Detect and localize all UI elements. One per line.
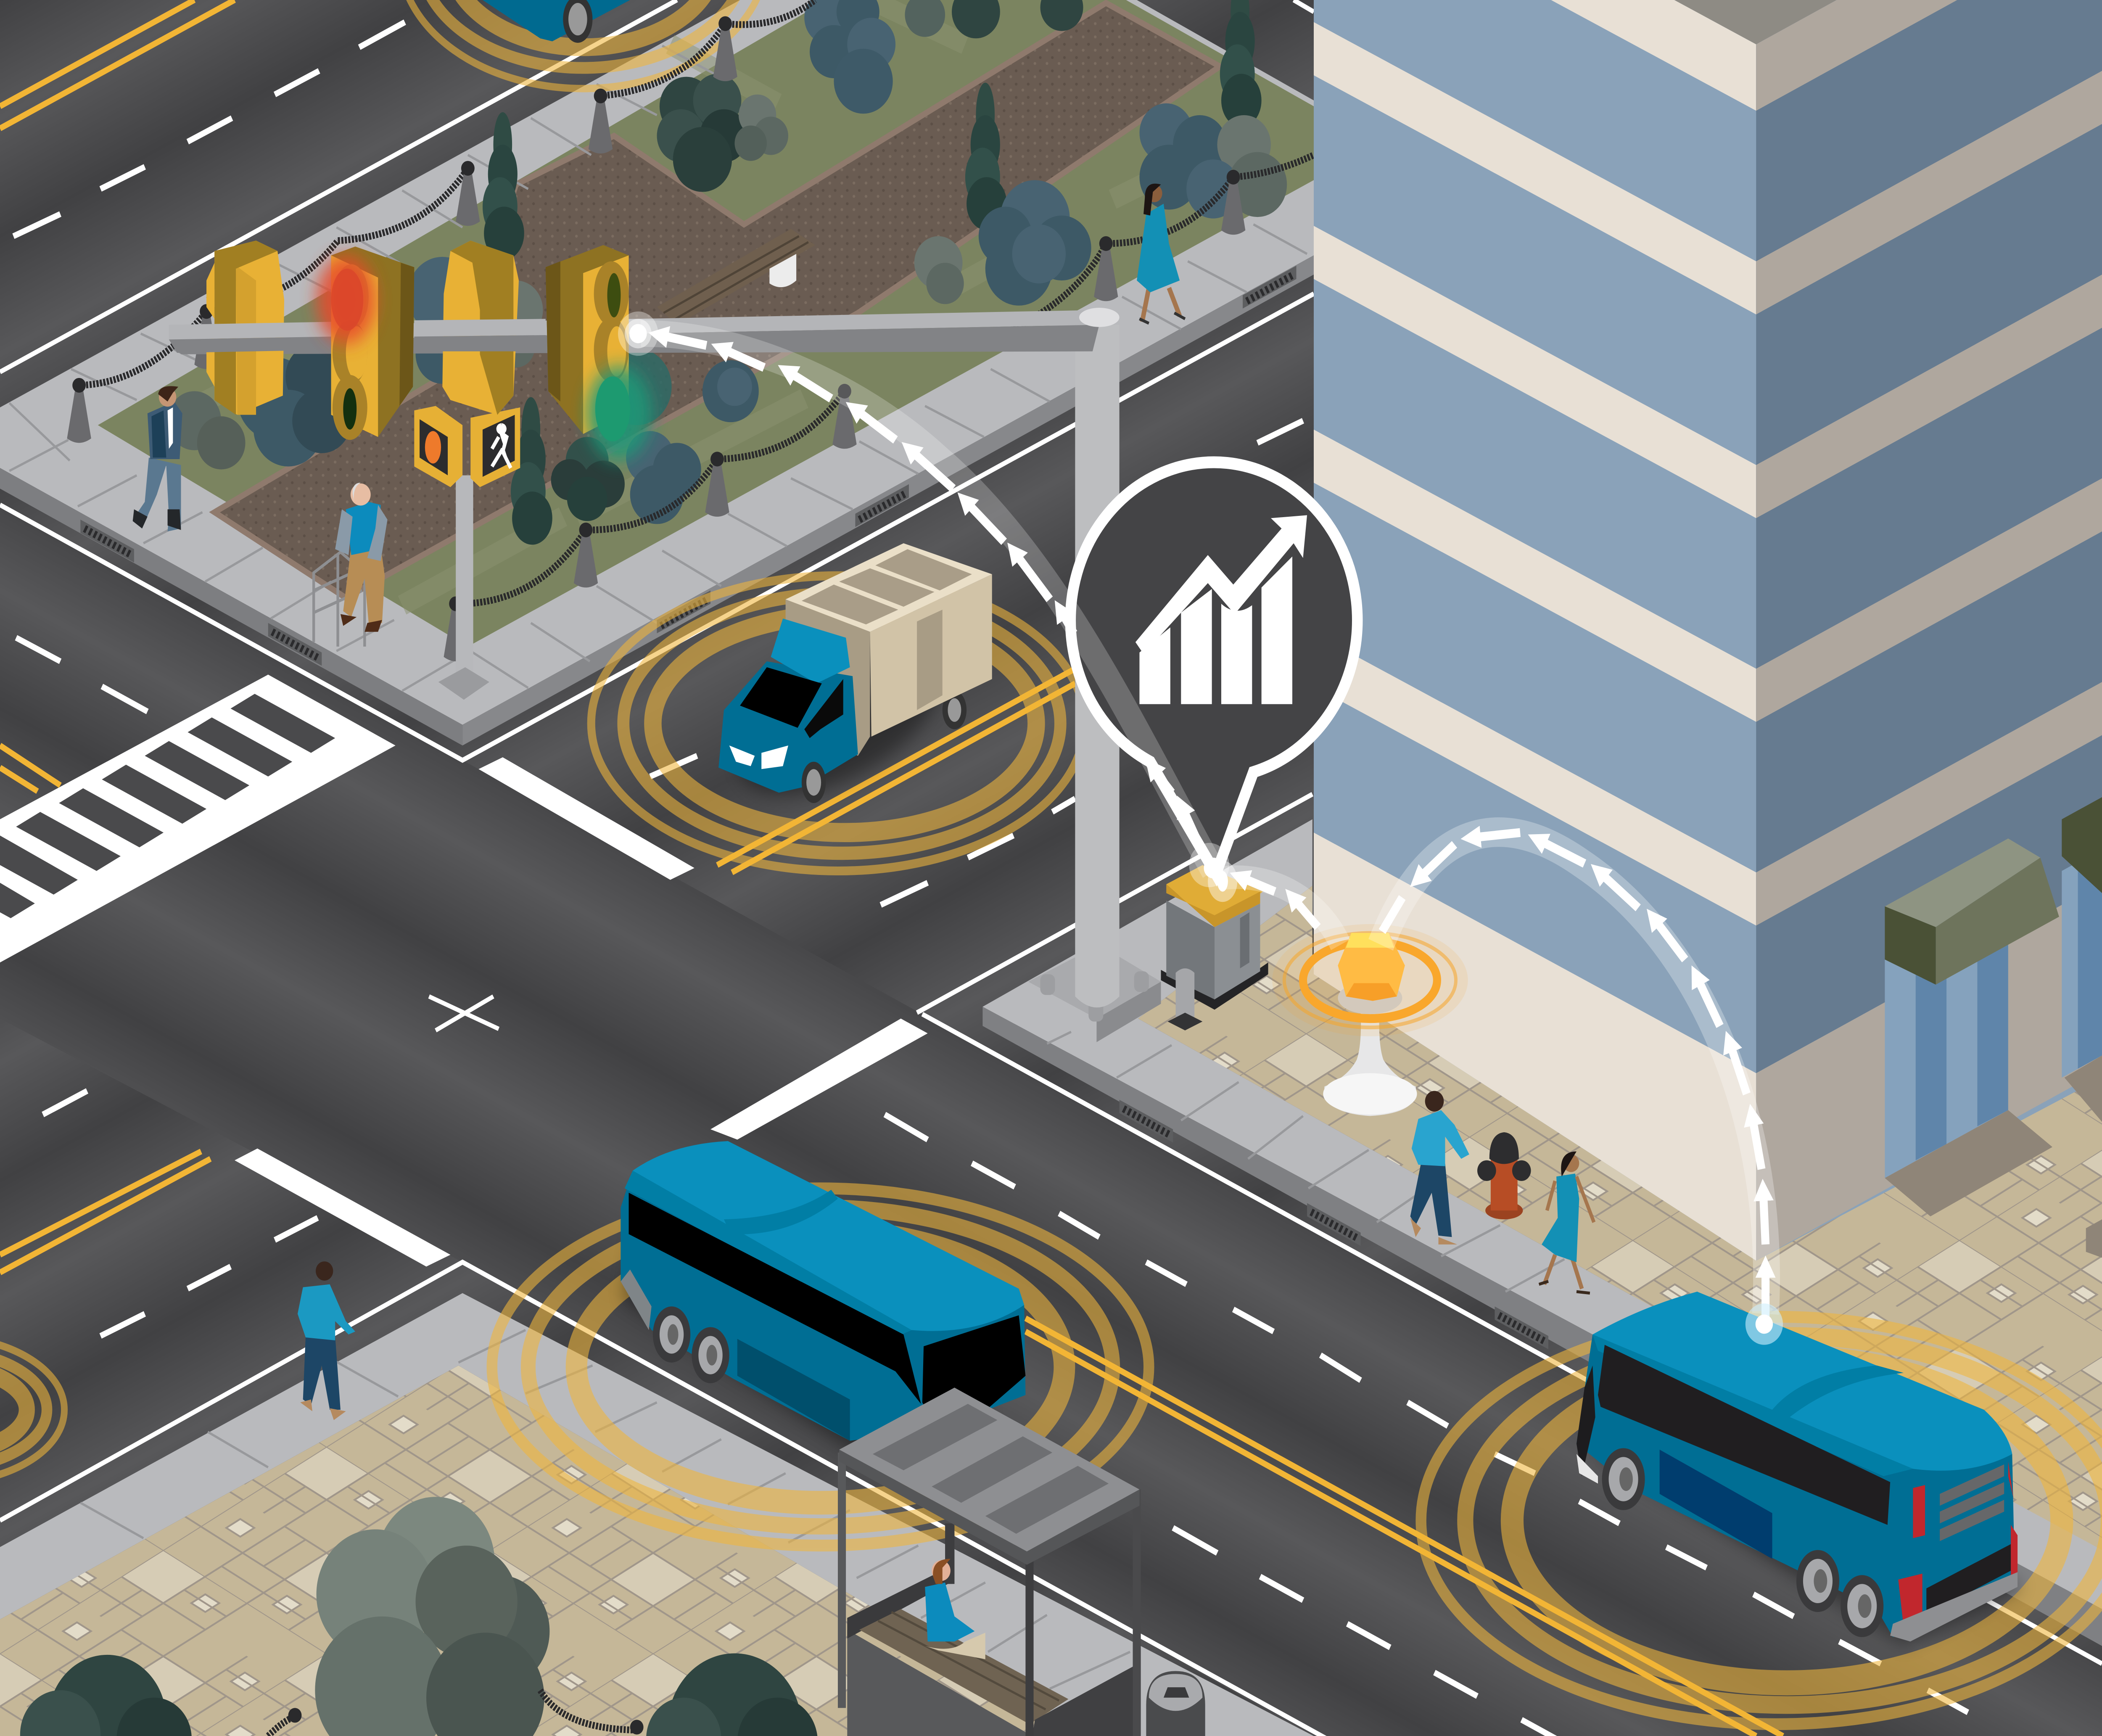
lower right sidewalk and paving bbox=[982, 819, 2102, 1646]
data flow arc: bus to orb bbox=[1381, 832, 1783, 1345]
traffic light with red lens bbox=[317, 246, 414, 440]
top bus partial bbox=[483, 0, 630, 43]
building right face bbox=[1756, 0, 2102, 1073]
street furniture cabinet bbox=[1161, 865, 1268, 1031]
building bbox=[1314, 0, 2102, 1260]
chain barriers with posts bbox=[67, 0, 1314, 661]
lower chain bbox=[268, 1690, 644, 1736]
bus shelter bbox=[838, 1387, 1141, 1736]
data orb on pedestal bbox=[1272, 924, 1468, 1116]
signal rings: right bus bbox=[1421, 1317, 2102, 1724]
mast arm pole bbox=[172, 308, 1161, 1042]
wooden bench in soil bed bbox=[657, 229, 815, 325]
data flow arc: cabinet to traffic light bbox=[641, 333, 1213, 871]
signal rings: top bus bbox=[399, 0, 767, 89]
person: man by hydrant bbox=[1410, 1091, 1469, 1245]
pedestrian signal pole bbox=[438, 476, 489, 700]
person: woman in blue dress at top bbox=[1137, 184, 1185, 323]
network node: traffic light bbox=[618, 312, 658, 356]
seated passenger bbox=[925, 1559, 985, 1659]
left bus bbox=[621, 1141, 1025, 1454]
storefront with awning bbox=[1885, 838, 2059, 1216]
data flow arc: orb to cabinet bbox=[1220, 877, 1341, 945]
person: man in jacket bbox=[133, 386, 182, 531]
tree cluster: right bed bbox=[1139, 0, 1287, 219]
person: man on lower crosswalk bbox=[298, 1261, 355, 1420]
building left face stripes bbox=[1314, 0, 1756, 1260]
delivery truck bbox=[718, 543, 992, 824]
fire hydrant bbox=[1477, 1132, 1531, 1219]
intersection cross mark bbox=[429, 996, 499, 1031]
person: woman by bus bbox=[1539, 1152, 1594, 1293]
signal rings: left bus bbox=[492, 1188, 1149, 1546]
walker pedestrian signals bbox=[414, 406, 520, 487]
right bus bbox=[1576, 1292, 2024, 1646]
top median block with sidewalk bbox=[0, 0, 1314, 745]
sidewalk joints bbox=[9, 46, 1307, 691]
stop bars bbox=[235, 757, 928, 1266]
tree cluster: centre right bed bbox=[914, 83, 1091, 306]
signal rings: left edge bbox=[0, 1336, 64, 1484]
info bubble with rising chart bbox=[1070, 462, 1357, 874]
person: elderly man with walker bbox=[314, 483, 388, 647]
tree cluster: top bed middle bbox=[804, 0, 1083, 114]
second storefront bbox=[2062, 797, 2102, 1258]
lower left sidewalk and paving bbox=[0, 1293, 1314, 1736]
signal rings: truck bbox=[591, 576, 1085, 871]
crosswalk bbox=[0, 675, 396, 962]
tree cluster: top bed left bbox=[657, 74, 788, 192]
signal arm in front of light backs bbox=[169, 319, 546, 353]
network node: cabinet bbox=[1189, 843, 1237, 902]
tree cluster: lower bed right bbox=[511, 349, 759, 545]
cypress behind signal bbox=[483, 112, 524, 260]
traffic light with green lens bbox=[546, 245, 652, 460]
dark trees lower edge bbox=[20, 1653, 818, 1736]
traffic light backs bbox=[206, 240, 519, 415]
large grey green tree bbox=[315, 1497, 549, 1736]
trash bin bbox=[1146, 1671, 1205, 1736]
soil planting band bbox=[214, 3, 1220, 598]
chart icon bbox=[1136, 515, 1307, 704]
tree cluster: lower bed left bbox=[168, 257, 543, 470]
